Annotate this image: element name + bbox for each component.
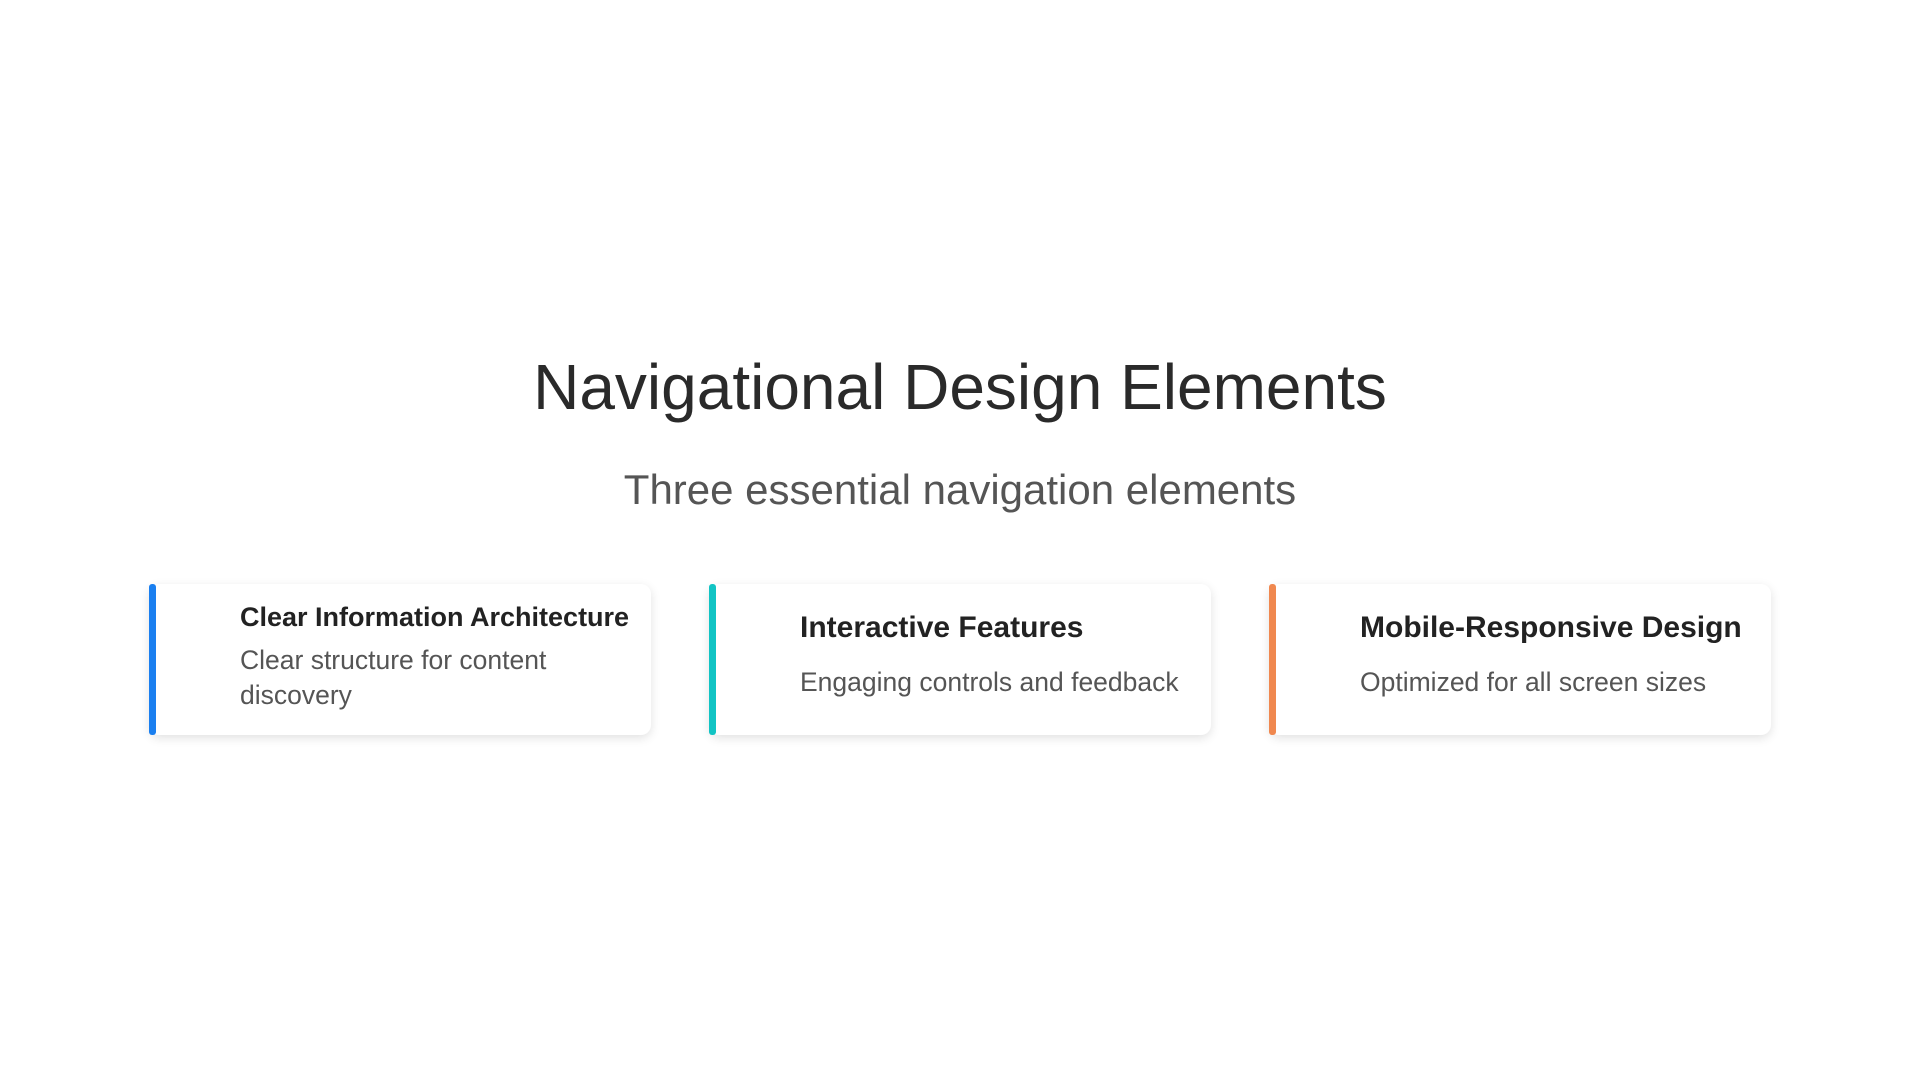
card: interactive features xyxy=(709,584,1211,735)
subtitle: Three essential navigation elements xyxy=(624,466,1296,513)
card description: Engaging controls and feedback xyxy=(800,667,1179,697)
card: clear information architecture xyxy=(149,584,651,735)
title: Navigational Design Elements xyxy=(533,351,1387,423)
card title: Clear Information Architecture xyxy=(240,602,629,632)
card title: Mobile-Responsive Design xyxy=(1360,611,1742,644)
card title: Interactive Features xyxy=(800,611,1083,644)
card description: Optimized for all screen sizes xyxy=(1360,667,1706,697)
card description: Clear structure for content discovery xyxy=(240,645,546,710)
card: mobile-responsive design xyxy=(1269,584,1771,735)
